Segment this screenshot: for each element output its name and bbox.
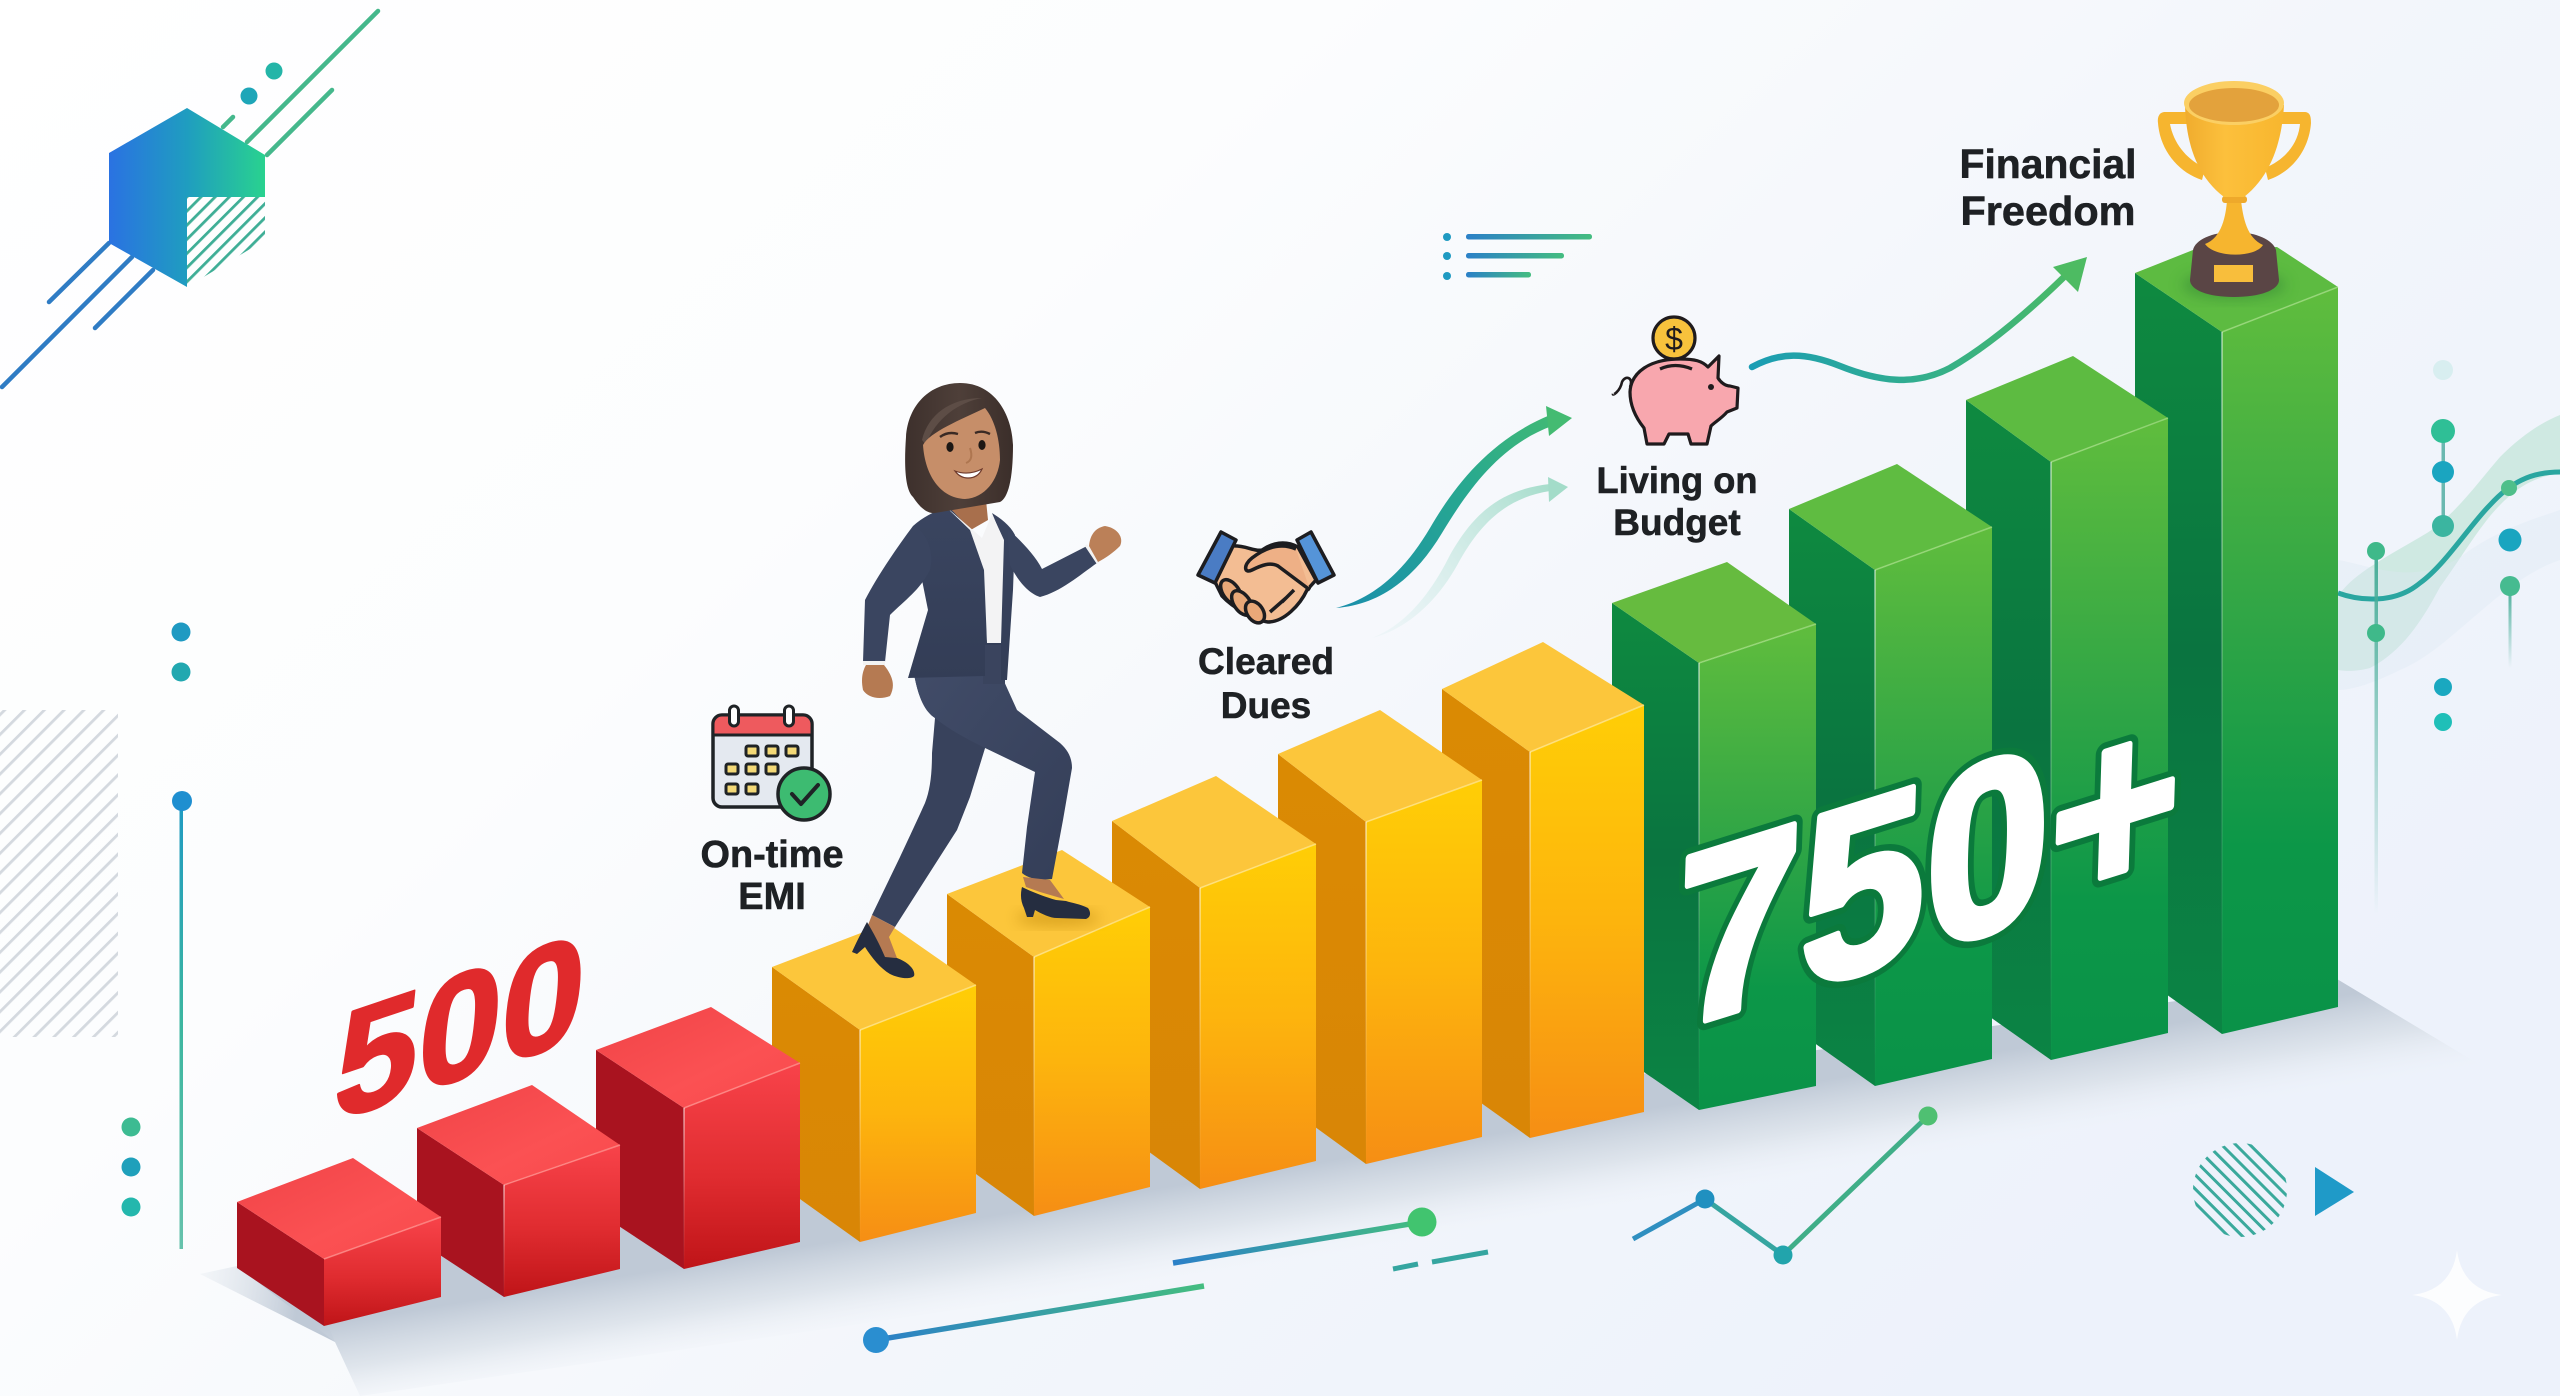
jacket: [908, 505, 1015, 680]
label: On-time EMI: EMI: [738, 876, 806, 918]
shirt: [945, 506, 1004, 643]
front leg: [913, 668, 1072, 879]
hair highlight: [922, 398, 982, 445]
red bar 3: [596, 1007, 800, 1269]
label: On-time EMI: [700, 834, 844, 918]
label: Cleared Dues: Cleared: [1198, 641, 1334, 682]
floor shadow: [200, 979, 2482, 1396]
decoration: zigzag line chart: [1633, 1106, 1938, 1264]
decoration: hatched circle: [2193, 1143, 2287, 1237]
back leg: [872, 668, 1002, 927]
label: Financial Freedom: Freedom: [1960, 188, 2136, 234]
foot shadows: [1016, 910, 1100, 926]
yellow bar 4: [1278, 710, 1482, 1164]
back shoe: [852, 922, 914, 978]
green bar 4: [2135, 247, 2338, 1034]
score label: 500: 500: [328, 899, 593, 1156]
icon: piggy bank with coin: [1613, 317, 1738, 444]
green bar 2: [1789, 464, 1992, 1086]
label: Cleared Dues: Dues: [1221, 685, 1311, 726]
yellow bar 1: [772, 923, 976, 1242]
neck: [945, 490, 988, 535]
waist fill: [983, 640, 1005, 684]
decoration: sparkle: [2412, 1250, 2502, 1340]
red bar 2: [417, 1085, 620, 1297]
icon: trophy: [2158, 81, 2311, 299]
score label: 750+: 750+: [1672, 649, 2185, 1082]
green bar 1: [1612, 562, 1816, 1110]
arrow: rising arrow to trophy: [1752, 257, 2087, 380]
icon: play triangle: [2315, 1167, 2354, 1216]
yellow bar 5: [1442, 642, 1644, 1138]
decoration: left dots and hatched panel: [0, 622, 192, 1249]
icon: piggy bank with coin: $: [1665, 321, 1683, 357]
front shoe: [1021, 887, 1090, 919]
label: Living on Budget: [1596, 460, 1758, 543]
left arm: [863, 526, 931, 662]
decoration: bottom gradient lines: [863, 1208, 1488, 1353]
arrow: main curved arrow: [1336, 406, 1572, 608]
label: Living on Budget: Budget: [1613, 502, 1741, 543]
label: Financial Freedom: Financial: [1960, 141, 2136, 187]
decoration: right wave and dots: [2338, 360, 2560, 914]
yellow bar 3: [1112, 776, 1316, 1189]
label: Financial Freedom: [1960, 141, 2136, 234]
face: [923, 408, 1000, 499]
icon: calendar with check: [713, 706, 830, 820]
label: Cleared Dues: [1198, 641, 1334, 726]
facial features: [940, 432, 990, 478]
yellow bar 2: [947, 850, 1150, 1216]
bar chart: score staircase: [237, 247, 2338, 1326]
red bar 1: [237, 1158, 441, 1326]
decoration: top-center text lines: [1443, 233, 1592, 280]
arrow: faded curved arrow: [1372, 477, 1568, 638]
label: On-time EMI: On-time: [700, 834, 844, 876]
icon: handshake: [1198, 532, 1334, 626]
decoration: top-left hexagon with lines: [2, 11, 378, 387]
right hand: [1089, 526, 1121, 562]
back foot skin: [868, 915, 897, 958]
hair: [905, 383, 1013, 513]
label: Living on Budget: Living on: [1596, 460, 1758, 501]
green bar 3: [1966, 356, 2168, 1060]
right arm: [1007, 528, 1097, 597]
front foot skin: [1023, 877, 1064, 899]
score label: 750+: 750+: [1672, 649, 2185, 1082]
character: woman climbing the steps: [852, 383, 1121, 978]
left hand: [862, 665, 893, 698]
